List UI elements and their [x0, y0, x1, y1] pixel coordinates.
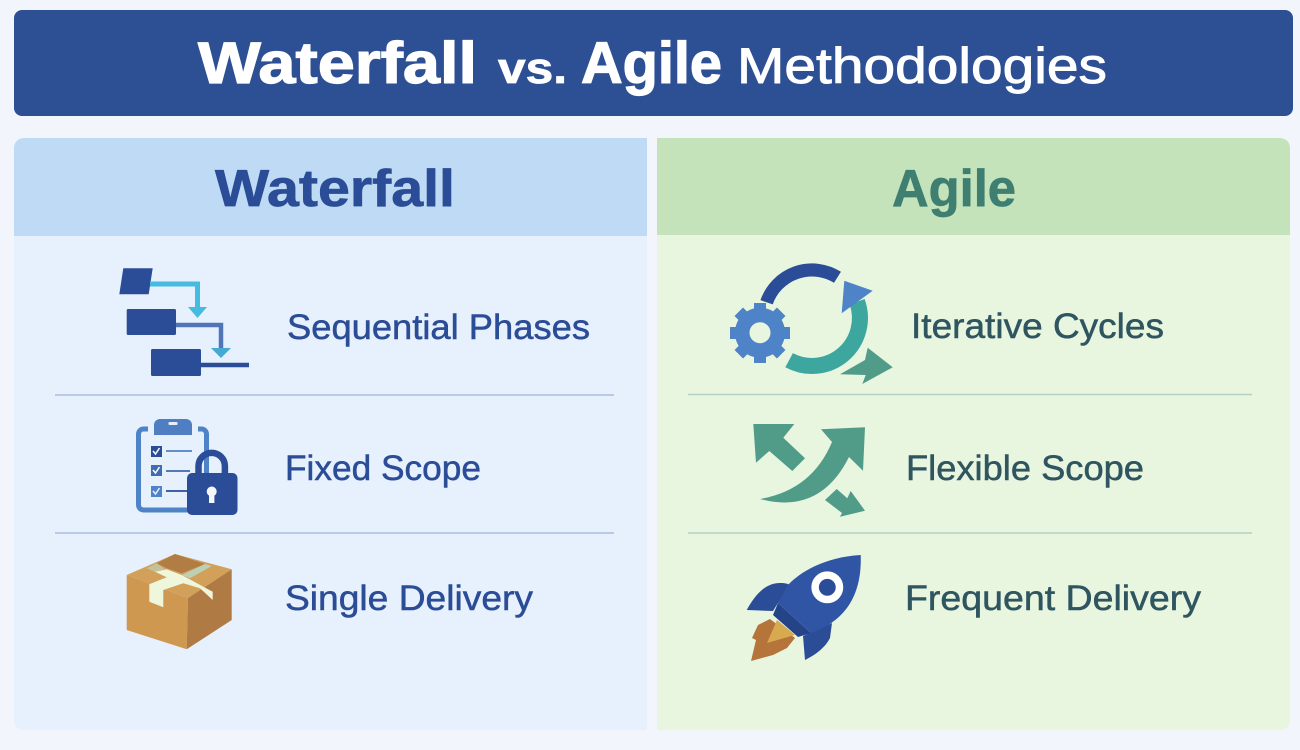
panel: Waterfall [14, 138, 647, 730]
Agile panel header [657, 138, 1290, 235]
label: Sequential Phases: Sequential Phases [287, 308, 590, 347]
title banner [14, 10, 1293, 116]
label: Flexible Scope: Flexible Scope [906, 449, 1144, 488]
icon: sequential flow diagram [119, 268, 249, 376]
icon: flexible arrows [753, 424, 865, 517]
Waterfall panel header [14, 138, 647, 236]
title text: Methodologies [737, 38, 1107, 94]
panel: Agile [657, 138, 1290, 730]
label: Single Delivery: Single Delivery [285, 579, 534, 618]
icon: clipboard with padlock [138, 419, 238, 515]
icon: rocket [747, 555, 861, 661]
Agile panel header: Agile [892, 160, 1016, 218]
label: Fixed Scope: Fixed Scope [285, 449, 481, 488]
gear [730, 303, 790, 363]
icon: cardboard box [127, 554, 232, 649]
title text: Waterfall [198, 31, 477, 96]
title text: vs. [498, 44, 567, 93]
Waterfall panel header: Waterfall [215, 160, 455, 218]
title text: Agile [581, 31, 722, 96]
label: Iterative Cycles: Iterative Cycles [911, 307, 1164, 346]
icon: iterative cycle with gear [730, 270, 893, 384]
label: Frequent Delivery: Frequent Delivery [905, 579, 1202, 618]
